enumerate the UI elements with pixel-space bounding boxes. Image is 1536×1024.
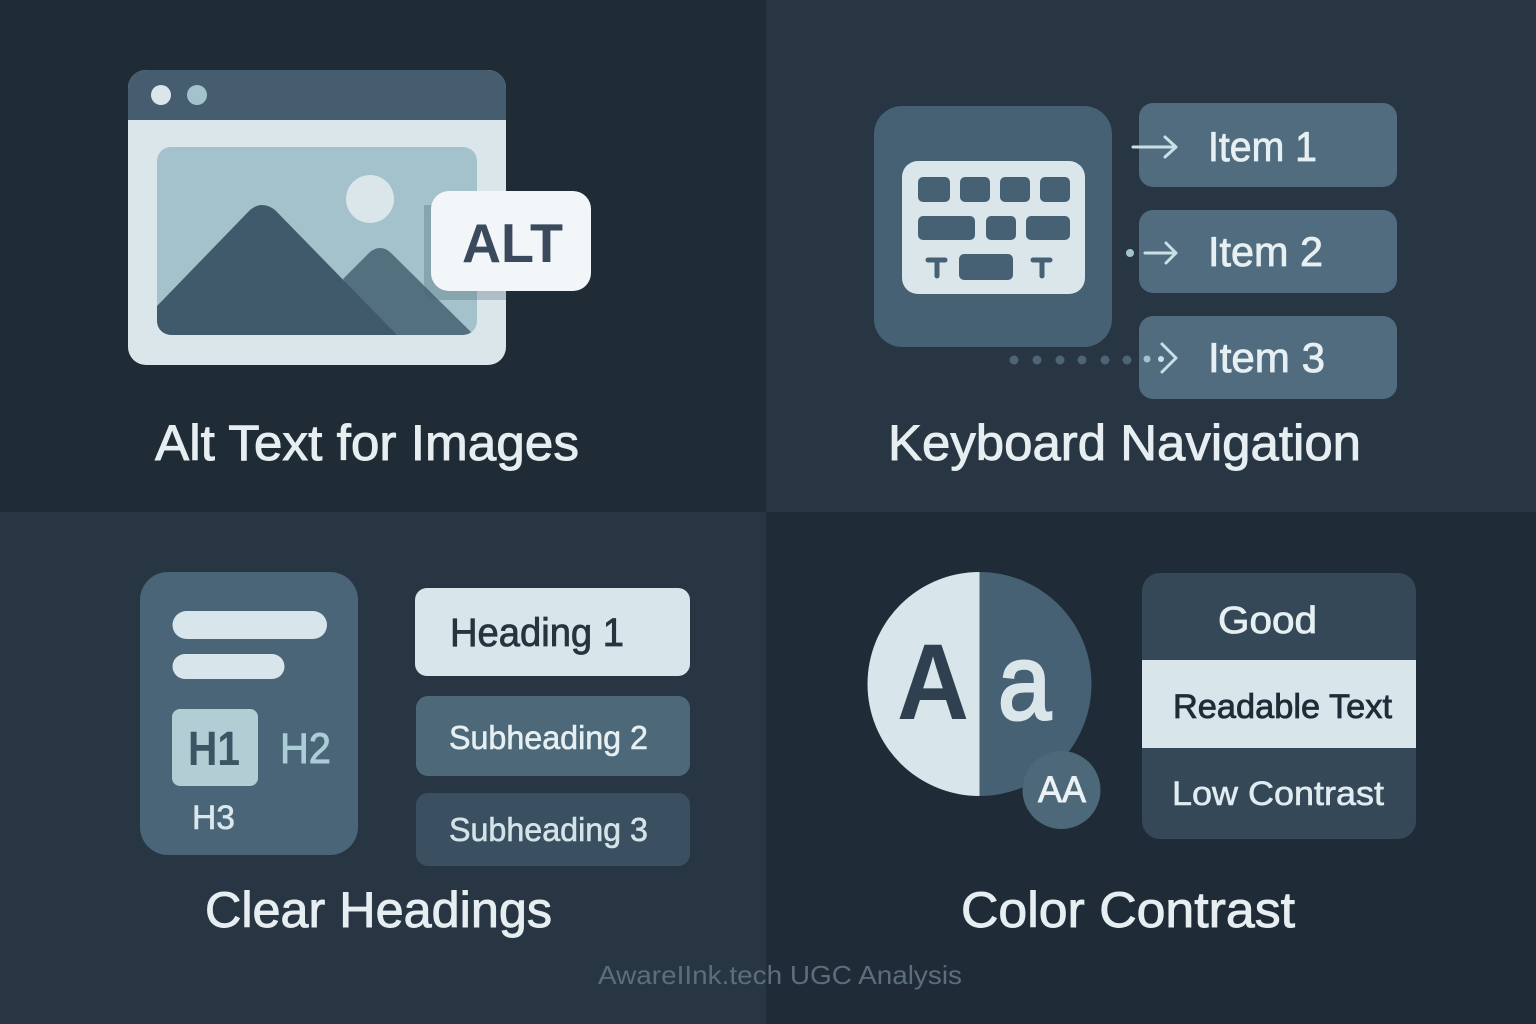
list item 3: Item 3 [1208, 334, 1325, 381]
badge: AA [1022, 751, 1100, 829]
heading level 1 row [415, 588, 690, 676]
arrow to item 1 [1133, 137, 1176, 157]
list item 2: Item 2 [1208, 228, 1323, 275]
icon: document outline [140, 572, 358, 855]
badge: AA: AA [1038, 769, 1086, 810]
heading level 1 row: Heading 1 [450, 611, 624, 655]
panel: clear headings [140, 572, 690, 938]
list item 3 [1139, 316, 1397, 399]
icon: document outline: H1 [188, 723, 240, 776]
icon: document outline: H2 [280, 725, 331, 773]
contrast table: Good [1218, 600, 1317, 642]
icon: contrast circle: A [897, 621, 969, 742]
icon: contrast circle [868, 572, 1092, 796]
heading: alt text for images: Alt Text for Images [155, 415, 579, 471]
arrow to item 3 with focus dots [1010, 344, 1176, 372]
arrow to item 2 [1126, 243, 1176, 263]
panel: keyboard navigation [874, 103, 1397, 471]
icon: ALT badge: ALT [462, 212, 563, 274]
watermark: AwareIInk.tech UGC Analysis [598, 960, 962, 990]
icon: keyboard [874, 106, 1112, 347]
subheading 3 row: Subheading 3 [449, 811, 648, 848]
heading: color contrast: Color Contrast [961, 882, 1295, 938]
heading: clear headings: Clear Headings [205, 882, 552, 938]
panel: alt text for images [128, 70, 591, 471]
subheading 3 row [416, 793, 690, 866]
list item 1: Item 1 [1208, 123, 1317, 170]
list item 1 [1139, 103, 1397, 187]
contrast table: Low Contrast [1172, 775, 1385, 813]
icon: browser window with image [128, 70, 506, 365]
panel: color contrast [868, 572, 1416, 938]
icon: ALT badge [431, 191, 591, 291]
heading: keyboard navigation: Keyboard Navigation [888, 415, 1361, 471]
icon: document outline: H3 [192, 799, 235, 837]
subheading 2 row [416, 696, 690, 776]
contrast table: Readable Text [1173, 688, 1393, 726]
subheading 2 row: Subheading 2 [449, 719, 648, 756]
icon: contrast circle: a [998, 621, 1052, 742]
contrast table [1141, 573, 1416, 839]
list item 2 [1139, 210, 1397, 293]
